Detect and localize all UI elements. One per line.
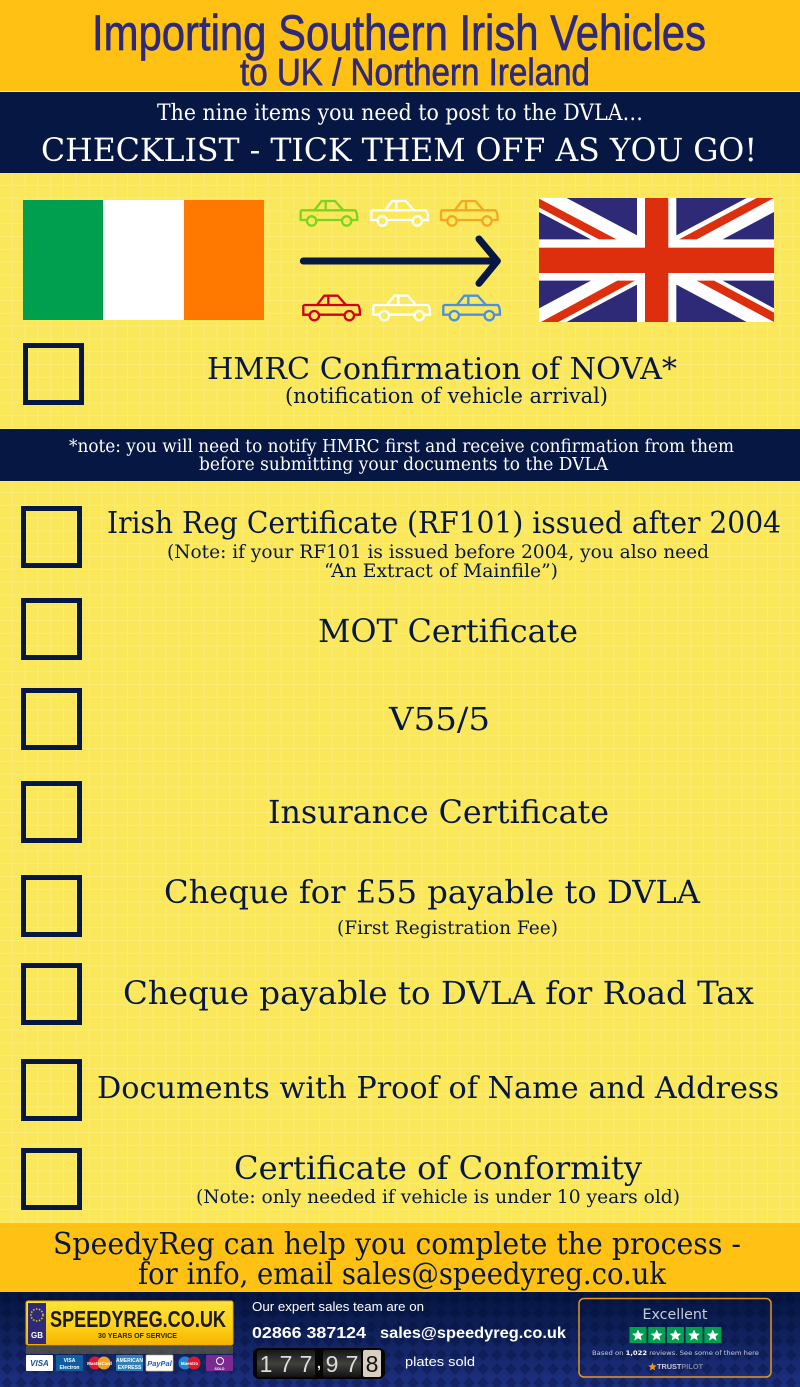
- icon: green car: [301, 201, 357, 226]
- item: MOT certificate: MOT Certificate: [318, 612, 578, 650]
- Trustpilot panel: [579, 1298, 771, 1377]
- icon: Visa: VISA: [30, 1359, 49, 1368]
- icon: five stars: [630, 1327, 721, 1343]
- item: proof of name and address: Documents with Proof of Name and Address: [97, 1071, 779, 1106]
- icon: American Express: [116, 1355, 143, 1371]
- item: certificate of conformity: (Note: only needed if vehicle is under 10 years old): [196, 1186, 680, 1208]
- contact text: 02866 387124: [252, 1325, 366, 1342]
- payment icons: [26, 1355, 233, 1371]
- icon: Solo: SOLO: [215, 1367, 225, 1371]
- plates sold counter: ,: [317, 1355, 321, 1371]
- icon: white car: [373, 296, 430, 320]
- plates sold counter: 7: [280, 1351, 292, 1377]
- plates sold counter: 1: [260, 1351, 272, 1377]
- plates sold counter: 9: [326, 1351, 338, 1377]
- subtitle banner: [0, 92, 800, 173]
- plates sold counter: 7: [300, 1351, 312, 1377]
- icon: PayPal: PayPal: [147, 1359, 173, 1368]
- plates sold counter: 8: [366, 1351, 378, 1377]
- icon: Union flag: [539, 198, 774, 322]
- item: Irish reg certificate: “An Extract of Mainfile”): [324, 560, 558, 582]
- Trustpilot logo: TRUSTPILOT: [657, 1364, 704, 1371]
- icon: cars and arrow: [301, 201, 500, 320]
- note banner: *note: you will need to notify HMRC first and receive confirmation from them: [69, 437, 734, 457]
- number plate logo: [26, 1301, 233, 1354]
- icon: American Express: EXPRESS: [118, 1365, 142, 1371]
- icon: Visa Electron: Electron: [59, 1365, 80, 1371]
- checklist heading: CHECKLIST - TICK THEM OFF AS YOU GO!: [41, 131, 757, 169]
- icon: American Express: AMERICAN: [116, 1358, 143, 1364]
- note banner: before submitting your documents to the DVLA: [199, 455, 608, 475]
- icon: Maestro: [176, 1355, 203, 1371]
- checkbox: RF101: [24, 508, 80, 566]
- checkbox: V55/5: [24, 690, 80, 748]
- icon: red car: [303, 296, 360, 320]
- contact text: sales@speedyreg.co.uk: [380, 1325, 566, 1342]
- call to action banner: [0, 1223, 800, 1292]
- call to action banner: SpeedyReg can help you complete the process -: [53, 1227, 741, 1262]
- checkbox: registration fee: [24, 878, 80, 934]
- review count: Based on 1,022 reviews. See some of them here: [592, 1349, 759, 1357]
- item: HMRC confirmation: (notification of vehicle arrival): [285, 384, 608, 408]
- call to action banner: for info, email sales@speedyreg.co.uk: [138, 1257, 667, 1292]
- checkbox: NOVA: [26, 346, 82, 402]
- icon: Visa Electron: VISA: [64, 1358, 76, 1364]
- icon: Mastercard: MasterCard: [87, 1361, 112, 1366]
- plates sold label: plates sold: [405, 1355, 475, 1369]
- item: insurance certificate: Insurance Certificate: [268, 793, 609, 831]
- title line 2: to UK / Northern Ireland: [240, 52, 590, 94]
- icon: blue car: [443, 296, 500, 320]
- item: HMRC confirmation: [207, 352, 677, 408]
- checkbox: conformity: [24, 1150, 80, 1208]
- subtitle line: The nine items you need to post to the DVLA…: [157, 101, 643, 126]
- number plate logo: GB: [31, 1331, 43, 1340]
- rating word: Excellent: [642, 1307, 708, 1323]
- arrow: [303, 239, 497, 283]
- contact text: [252, 1300, 566, 1342]
- item: road tax cheque: Cheque payable to DVLA for Road Tax: [123, 974, 754, 1012]
- number plate logo: 30 YEARS OF SERVICE: [98, 1333, 177, 1340]
- plates sold counter: [253, 1348, 385, 1379]
- number plate logo: SPEEDYREG.CO.UK: [50, 1306, 226, 1332]
- checkbox: proof of name: [24, 1062, 80, 1118]
- item: HMRC confirmation: HMRC Confirmation of NOVA*: [207, 352, 677, 387]
- icon: Visa: [26, 1355, 53, 1371]
- item: registration fee cheque: (First Registration Fee): [337, 917, 558, 939]
- contact text: Our expert sales team are on: [252, 1300, 424, 1314]
- checkbox: road tax: [24, 966, 80, 1022]
- note banner: [0, 429, 800, 481]
- icon: Solo: [206, 1355, 233, 1371]
- icon: PayPal: [146, 1355, 173, 1371]
- item: registration fee cheque: [164, 873, 701, 939]
- footer panel: [0, 1292, 800, 1387]
- item: registration fee cheque: Cheque for £55 payable to DVLA: [164, 873, 701, 911]
- icon: Maestro: Maestro: [181, 1361, 198, 1366]
- icon: white car: [371, 201, 428, 226]
- item: Irish reg certificate: [107, 506, 781, 582]
- icon: Irish flag: [23, 200, 264, 320]
- item: certificate of conformity: [196, 1149, 680, 1208]
- icon: Visa Electron: [56, 1355, 83, 1371]
- item: Irish reg certificate: (Note: if your RF101 is issued before 2004, you also need: [167, 541, 709, 563]
- item: V55/5: V55/5: [388, 700, 490, 738]
- title banner: [0, 0, 800, 94]
- icon: orange car: [441, 201, 498, 226]
- checkbox: MOT: [24, 600, 80, 658]
- icon: Mastercard: [86, 1355, 113, 1371]
- item: certificate of conformity: Certificate of Conformity: [234, 1149, 642, 1187]
- Trustpilot logo: [648, 1362, 704, 1371]
- checkbox: insurance: [24, 784, 80, 840]
- plates sold counter: 7: [346, 1351, 358, 1377]
